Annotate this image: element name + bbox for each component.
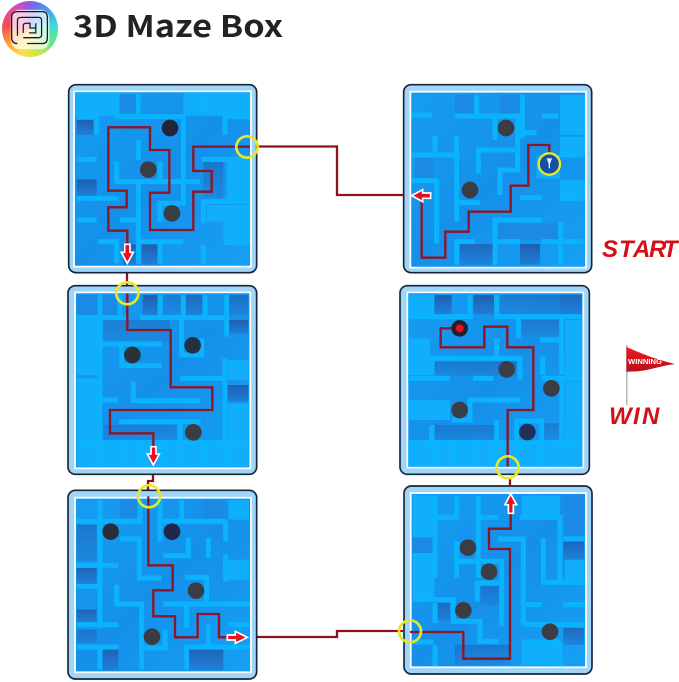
ball — [188, 582, 204, 599]
arrow: connector from panel 6 to panel 4 — [508, 478, 510, 485]
panel: maze middle left — [68, 282, 257, 474]
arrow: exit right — [227, 631, 247, 643]
arrow: exit down — [147, 447, 159, 465]
ball — [462, 182, 478, 198]
ball — [184, 337, 201, 354]
ball — [460, 539, 476, 556]
arrow: exit down — [121, 244, 133, 263]
goal ball with red dot — [451, 320, 468, 337]
yellow checkpoint ring — [116, 282, 138, 304]
panel: maze top right — [404, 85, 592, 273]
yellow checkpoint ring — [497, 456, 519, 478]
ball — [124, 347, 141, 363]
ball — [102, 523, 119, 540]
ball — [185, 424, 202, 441]
arrow: exit left — [412, 190, 431, 202]
ball — [519, 424, 536, 440]
ball — [498, 120, 514, 136]
icon: winning flag — [626, 345, 675, 405]
ball — [164, 205, 180, 222]
panel: maze top left — [69, 85, 258, 273]
ball — [162, 120, 178, 136]
yellow checkpoint ring — [138, 485, 160, 507]
maze solution path — [441, 327, 533, 467]
arrow: connector from panel 5 to panel 6 — [257, 631, 403, 637]
arrow: exit up — [505, 494, 517, 513]
ball — [543, 380, 560, 397]
START label: START — [602, 236, 679, 263]
ball — [144, 628, 160, 645]
yellow checkpoint ring — [399, 620, 421, 642]
start ball with yellow ring — [539, 153, 560, 175]
ball — [451, 402, 468, 418]
yellow checkpoint ring — [236, 136, 258, 158]
icon: winning flag: WINNING — [628, 357, 662, 366]
panel: maze bottom right — [399, 486, 592, 674]
WIN label: WIN — [609, 403, 660, 430]
maze solution path — [148, 496, 230, 637]
maze solution path — [410, 508, 511, 659]
ball — [542, 623, 558, 640]
ball — [455, 602, 472, 619]
ball — [140, 161, 157, 178]
title: 3D Maze Box — [73, 2, 283, 46]
ball — [164, 523, 180, 540]
panel: maze middle right — [400, 286, 589, 478]
maze solution path — [422, 145, 549, 258]
maze solution path — [110, 293, 212, 448]
arrow: connector from panel 3 to panel 1 — [126, 273, 128, 285]
icon: rainbow maze logo — [2, 1, 58, 57]
ball — [481, 563, 497, 580]
arrow: connector from panel 5 to panel 3 — [148, 475, 153, 490]
panel: maze bottom left — [68, 485, 257, 679]
ball — [498, 361, 515, 378]
maze solution path — [108, 127, 250, 248]
arrow: connector from panel 1 to panel 2 — [258, 146, 403, 195]
